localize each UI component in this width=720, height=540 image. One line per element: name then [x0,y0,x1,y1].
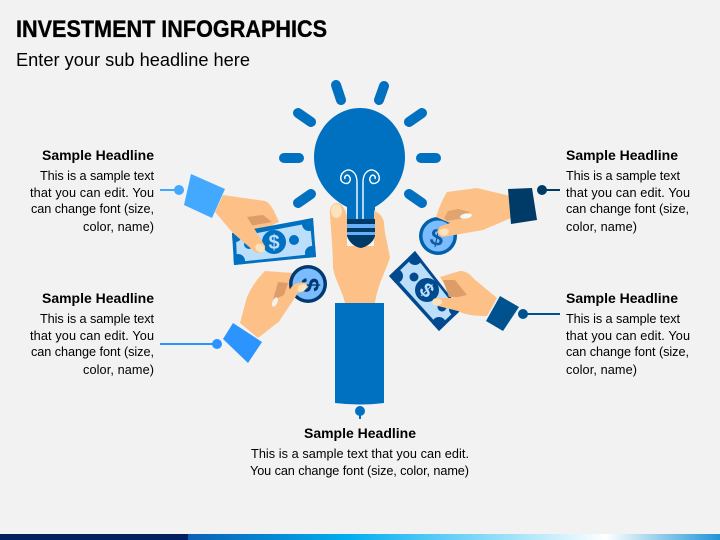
coin: $ [295,278,325,293]
nail [432,298,442,306]
text block: bottom right [566,290,690,377]
text block: bottom right: that you can edit. You [566,329,690,343]
sleeve [223,323,262,363]
thumb nail [331,204,342,218]
hand [215,195,279,240]
text block: top left [30,147,154,234]
icon: bulb glass [314,108,405,222]
text block: bottom left: can change font (size, [31,345,154,359]
coin [289,265,327,303]
title: INVESTMENT INFOGRAPHICS [16,16,327,43]
hand [433,271,497,316]
subtitle: Enter your sub headline here [16,50,250,70]
connector [160,185,184,195]
icon: filament [341,170,379,219]
text block: bottom left: This is a sample text [40,312,154,326]
sleeve [486,296,519,331]
text block: top left: can change font (size, [31,202,154,216]
shade [273,282,288,300]
shade [246,215,272,226]
icon: light rays [284,85,436,203]
white gap [460,213,472,219]
finger [268,282,307,323]
text block: bottom right: This is a sample text [566,312,680,326]
hand with coin: bottom left [160,265,327,363]
sleeve [335,303,384,404]
text block: top left: that you can edit. You [30,186,154,200]
coin: $ [427,223,447,253]
text block: top left: This is a sample text [40,169,154,183]
coin [419,217,457,255]
gap [271,296,279,308]
text block: top right: This is a sample text [566,169,680,183]
text block: top left: color, name) [83,220,154,234]
text block: bottom right: can change font (size, [566,345,689,359]
text block: top left: Sample Headline [42,147,154,163]
hand with coin: top right [419,185,560,255]
text block: bottom center [250,425,469,478]
hand [436,188,511,237]
center hand with light bulb [314,108,405,404]
hand [240,271,300,338]
text block: bottom right: color, name) [566,363,637,377]
connector [537,185,560,195]
text block: bottom center: You can change font (size, color, name) [250,464,469,478]
connector [518,309,560,319]
text block: top right: that you can edit. You [566,186,690,200]
banknote: $ [268,232,280,254]
text block: bottom left: that you can edit. You [30,329,154,343]
text block: bottom center: This is a sample text that you can edit. [251,447,469,461]
connector [160,339,222,349]
banknote [389,251,463,331]
text block: bottom left: color, name) [83,363,154,377]
shade [443,280,467,297]
sleeve [508,188,537,224]
text block: top right: color, name) [566,220,637,234]
icon: bulb base [347,219,375,248]
footer bar [0,534,720,540]
text block: top right: can change font (size, [566,202,689,216]
hand with banknote: bottom right [389,251,560,331]
text block: top right: Sample Headline [566,147,678,163]
finger [215,205,265,253]
shade [444,209,470,221]
text block: bottom left [30,290,154,377]
hand with banknote: top left [160,174,319,268]
sleeve [184,174,225,218]
banknote: $ [415,279,438,302]
nail [438,228,450,236]
text block: bottom left: Sample Headline [42,290,154,306]
text block: bottom center: Sample Headline [304,425,416,441]
text block: bottom right: Sample Headline [566,290,678,306]
connector: bottom [355,406,365,419]
hand holding bulb [330,203,390,303]
text block: top right [566,147,690,234]
banknote [232,218,316,265]
